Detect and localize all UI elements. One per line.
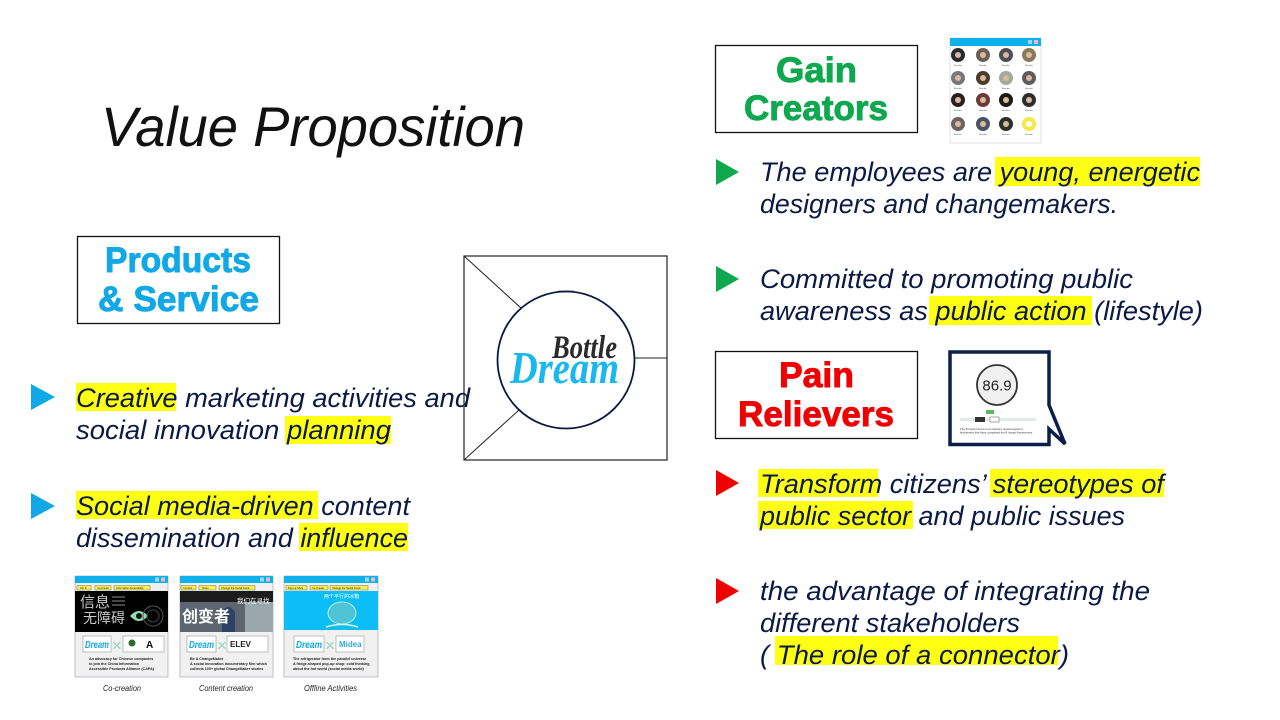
card: offline activities: A fridge-shaped pop-up shop: cold thinking: [293, 662, 369, 666]
bullet: public awareness: Committed to promoting public: [760, 264, 1133, 294]
card: content creation: Be A ChangeMaker: [190, 657, 224, 661]
callout: score 86.9: 86.9: [982, 378, 1012, 394]
bullet: creative marketing: social innovation planning: [76, 415, 391, 445]
panel: pain relievers: [716, 352, 1167, 670]
team photo grid: Member: [979, 64, 987, 67]
card: offline activities: Midea: [339, 640, 362, 649]
heading: pain relievers: [716, 352, 918, 438]
callout: score 86.9: businesses that have completed the B Impact Assessment: [960, 430, 1033, 434]
card: offline activities: Change the Social Good: [332, 586, 361, 590]
team photo grid: Member: [979, 109, 987, 112]
bullet: connector: different stakeholders: [760, 608, 1020, 638]
card: content creation: ×: [217, 636, 227, 655]
caption: offline activities: Offline Activities: [304, 684, 357, 693]
bullet: creative marketing: Creative marketing activities and: [76, 383, 471, 413]
heading: pain relievers: Relievers: [738, 395, 894, 434]
team photo grid: Member: [954, 87, 962, 90]
card: co-creation: Dream: [85, 640, 109, 651]
logo: Bottle Dream: [509, 330, 619, 393]
caption: co-creation: Co-creation: [103, 684, 141, 693]
card: co-creation: [75, 576, 168, 677]
team photo grid: Member: [1002, 87, 1010, 90]
card: co-creation: Co-Create: [97, 586, 110, 590]
team photo grid: Member: [1002, 109, 1010, 112]
card: content creation: Dream: [189, 640, 214, 651]
card: co-creation: A: [146, 640, 153, 651]
card: co-creation: Accessible Products Alliance (CAPA): [89, 667, 155, 671]
card: offline activities: ×: [325, 636, 335, 655]
team photo grid: Member: [979, 87, 987, 90]
card: content creation: A social innovation documentary film which: [190, 662, 268, 666]
bullet: transform stereotypes: [716, 469, 1167, 531]
card: offline activities: Co-Create: [312, 586, 325, 590]
bullet: young designers: The employees are young, energetic: [760, 157, 1200, 187]
bullet: social media: Social media-driven content: [76, 491, 411, 521]
card: offline activities: about the hot world (social media world): [293, 667, 364, 671]
team photo grid: Member: [1002, 133, 1010, 136]
logo: Bottle Dream: Bottle: [551, 330, 617, 366]
heading: gain creators: Gain: [776, 51, 857, 90]
card: offline activities: Dream: [296, 640, 322, 651]
heading: gain creators: Creators: [744, 89, 888, 128]
team photo grid: Member: [1025, 87, 1033, 90]
bullet: young designers: designers and changemakers.: [760, 189, 1118, 219]
team photo grid: [950, 38, 1041, 143]
card: co-creation: 信息: [80, 594, 110, 611]
team photo grid: Member: [1002, 64, 1010, 67]
card: co-creation: 无障碍: [83, 610, 125, 626]
bullet: public awareness: awareness as public action (lifestyle): [760, 296, 1203, 326]
card: content creation: Change the Social Good: [221, 586, 250, 590]
bullet: young designers: [716, 157, 1200, 219]
card: co-creation: ×: [112, 636, 122, 655]
bullet: public awareness: [716, 264, 1203, 326]
bullet: creative marketing: [31, 383, 471, 445]
heading: products and service: [78, 236, 280, 324]
card: co-creation: Vol. 8: [80, 586, 87, 590]
title: Value Proposition: [101, 95, 525, 158]
bullet: connector: the advantage of integrating the: [760, 576, 1150, 606]
card: offline activities: 两个平行的冰箱: [324, 593, 359, 600]
bullet: social media: [31, 491, 411, 553]
logo: Bottle Dream: Dream: [509, 343, 619, 393]
card: content creation: 我们在寻找: [237, 596, 270, 605]
card: offline activities: The refrigerator from the parallel universe: [293, 657, 366, 661]
card: content creation: ELEV: [230, 640, 252, 649]
card: offline activities: [284, 576, 378, 677]
panel: products and service: [31, 236, 471, 553]
heading: products and service: Products: [105, 241, 251, 280]
bullet: connector: [716, 576, 1150, 670]
heading: pain relievers: Pain: [779, 356, 854, 395]
team photo grid: Member: [954, 133, 962, 136]
value map diagram: [464, 256, 667, 460]
heading: products and service: & Service: [98, 280, 259, 319]
team photo grid: Member: [1025, 109, 1033, 112]
card: content creation: Content: [183, 586, 192, 590]
panel: gain creators: [716, 38, 1203, 326]
bullet: transform stereotypes: Transform citizens’ stereotypes of: [760, 469, 1167, 499]
team photo grid: Member: [1025, 64, 1033, 67]
team photo grid: Member: [979, 133, 987, 136]
team photo grid: Member: [954, 109, 962, 112]
card: co-creation: Information Accessibility: [116, 586, 144, 590]
card: offline activities: Pop-up Shop: [288, 586, 304, 590]
callout: score 86.9: [950, 352, 1065, 444]
callout: score 86.9: The B Impact Score is an industry-neutral signal of: [960, 427, 1023, 431]
card: content creation: Video: [202, 586, 209, 590]
card: co-creation: An advocacy for Chinese companies: [89, 657, 153, 661]
team photo grid: Member: [1025, 133, 1033, 136]
team photo grid: Member: [954, 64, 962, 67]
bullet: transform stereotypes: public sector and public issues: [759, 501, 1125, 531]
card: co-creation: to join the China Information: [89, 662, 140, 666]
heading: gain creators: [716, 46, 918, 132]
card: content creation: 创变者: [182, 607, 230, 626]
card: content creation: collects 100+ global ChangeMaker stories: [190, 667, 263, 671]
bullet: social media: dissemination and influence: [76, 523, 408, 553]
card: content creation: [180, 576, 273, 677]
caption: content creation: Content creation: [199, 684, 254, 693]
bullet: connector: ( The role of a connector): [760, 640, 1069, 670]
